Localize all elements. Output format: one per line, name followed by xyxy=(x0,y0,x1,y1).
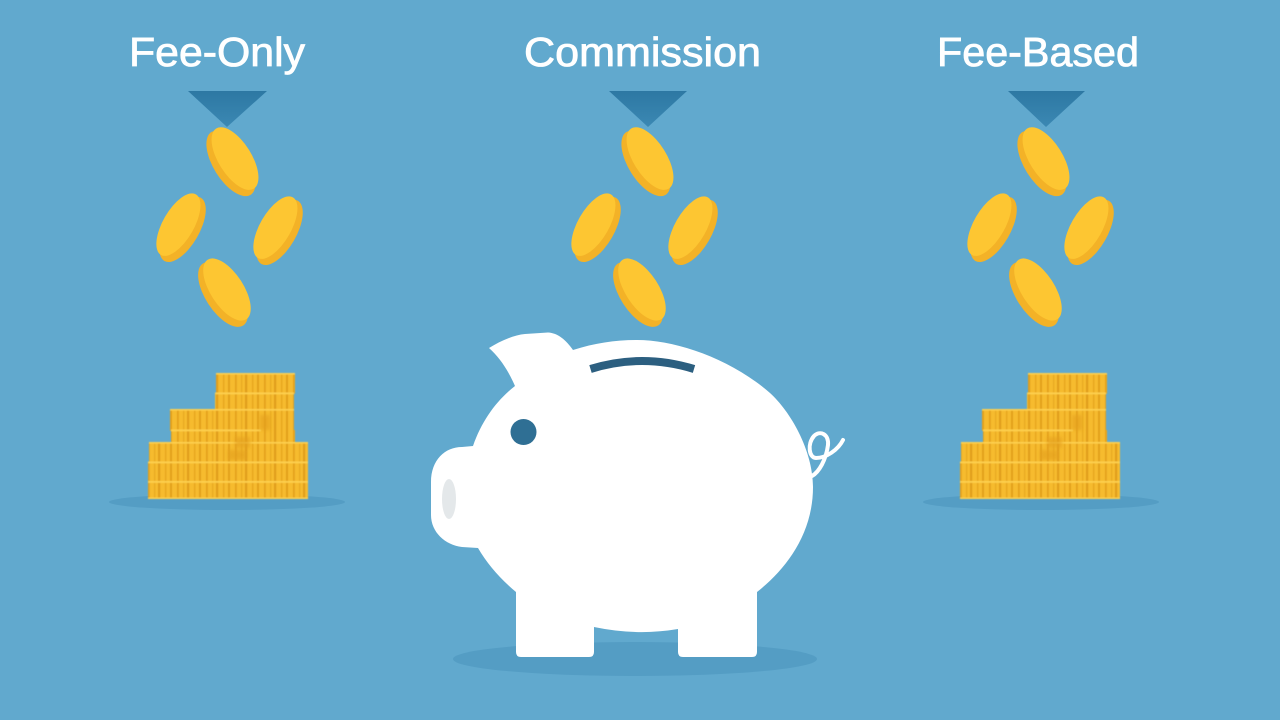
shadow: left stack xyxy=(109,494,345,510)
heading: Fee-Only: Fee-Only xyxy=(129,29,306,75)
pig nostril xyxy=(442,479,456,519)
funnel: Fee-Based xyxy=(1008,91,1085,127)
shadow: right stack xyxy=(923,494,1159,510)
pig tail xyxy=(810,433,843,476)
piggy bank xyxy=(431,332,843,657)
falling coins: Commission xyxy=(561,120,727,335)
heading: Commission: Commission xyxy=(524,29,761,75)
coin slot xyxy=(590,361,694,369)
coin stack: Fee-Based xyxy=(960,373,1120,499)
funnel: Commission xyxy=(609,91,687,127)
pig body xyxy=(431,332,813,657)
falling coins: Fee-Only xyxy=(146,120,312,335)
heading: Fee-Based: Fee-Based xyxy=(937,29,1139,75)
falling coins: Fee-Based xyxy=(957,120,1123,335)
coin stack: Fee-Only xyxy=(148,373,308,499)
shadow: piggy bank xyxy=(453,642,817,676)
funnel: Fee-Only xyxy=(188,91,267,127)
pig eye xyxy=(510,419,536,445)
